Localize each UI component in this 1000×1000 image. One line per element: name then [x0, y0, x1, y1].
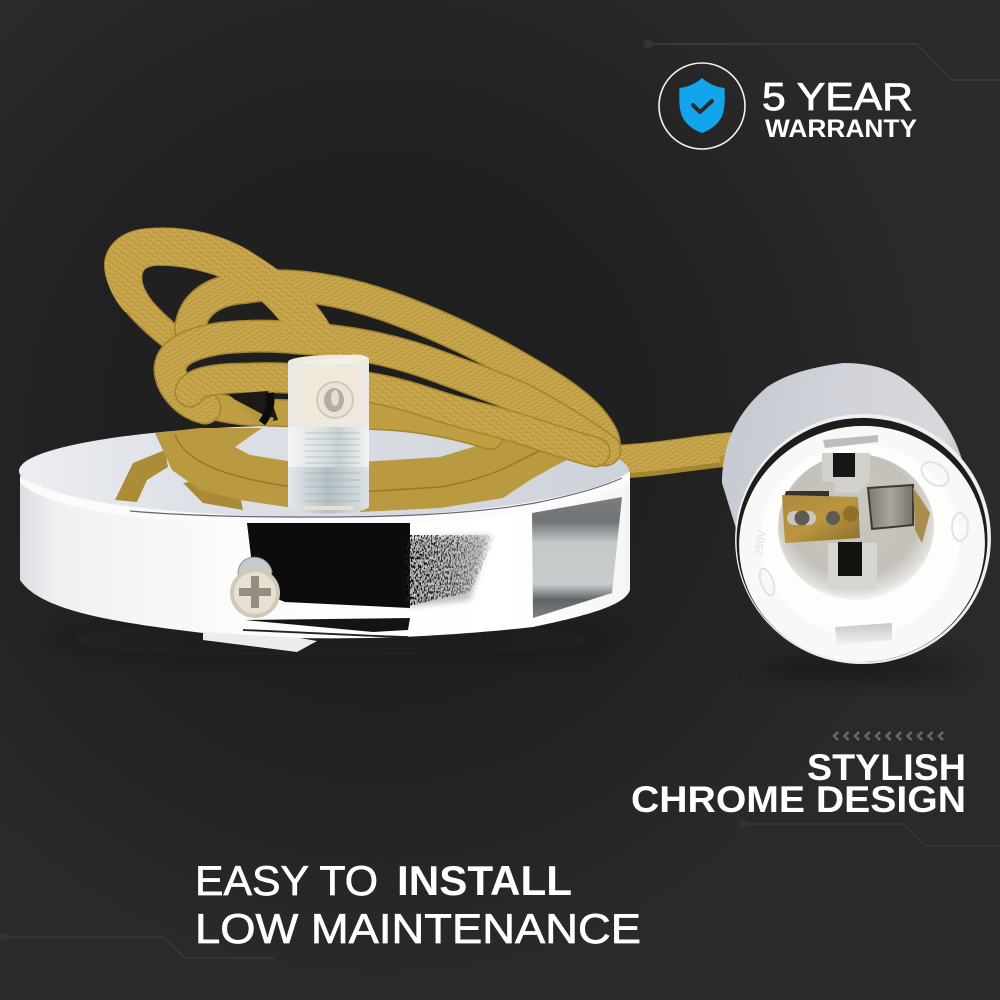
- embossed rating text: 250V: [753, 529, 769, 556]
- holder shadow: [755, 662, 965, 674]
- clip under disc: [203, 632, 317, 652]
- nickel contact: [868, 485, 930, 543]
- white face: [724, 410, 1000, 678]
- cable: lower coil band: [195, 398, 490, 436]
- side panel: chrome window: [532, 497, 622, 618]
- decorative circuit line: bottom left: [0, 933, 275, 958]
- dark gap with black wire: [228, 391, 278, 423]
- clamp threaded section: translucent: [288, 427, 369, 467]
- product: lamp holder: [719, 363, 1000, 681]
- embossed marks: [757, 457, 968, 597]
- bottom notch: [835, 623, 892, 645]
- clamp screw: [317, 382, 353, 418]
- product: ceiling disc with gold cable: [19, 228, 630, 652]
- text: 5 year: 5 YEAR: [762, 76, 913, 119]
- decorative circuit line: lower right: [739, 820, 1000, 846]
- right main reflection: [360, 432, 590, 512]
- decorative circuit line: top right: [643, 39, 1000, 80]
- disc side wall: [20, 472, 630, 638]
- disc front edge line: [130, 478, 622, 517]
- translucent cord clamp: [288, 355, 369, 514]
- brass contact: [782, 491, 860, 543]
- heading: easy to install low maintenance: INSTALL: [397, 857, 572, 904]
- cable: coil outer band: [170, 336, 605, 450]
- right reflection seam: [360, 445, 553, 492]
- clamp threaded section: solid lower: [288, 467, 369, 514]
- cable to lamp holder: [600, 447, 740, 498]
- clamp thread lines: [305, 433, 360, 501]
- cable: back loop: [105, 228, 343, 357]
- disc front bevel highlight: [20, 472, 629, 526]
- reflections of cable on disc top: [115, 428, 590, 512]
- heading: stylish chrome design: STYLISH: [807, 747, 966, 788]
- clamp bottom tan edge: [303, 506, 353, 510]
- side panel: grey tone under speckle: [408, 535, 490, 607]
- inner face ring: [760, 444, 960, 636]
- warranty badge: [659, 63, 917, 149]
- top black slot: [833, 453, 855, 477]
- chrome body: [722, 363, 990, 660]
- clamp top opening: [298, 355, 369, 365]
- cable: front braided section into clamp: [105, 228, 343, 357]
- clamp upper body: [288, 355, 369, 430]
- side panel: speckled reflection: [405, 535, 497, 607]
- heading: stylish chrome design: CHROME DESIGN: [631, 779, 966, 820]
- cable: coil inner band: [190, 378, 595, 452]
- heading: easy to install low maintenance: [195, 857, 641, 952]
- top slot surround: [822, 453, 870, 493]
- chevron row: [834, 732, 943, 740]
- icon: shield in circle: [659, 63, 745, 149]
- left reflection seams: [175, 435, 300, 488]
- bottom black slot: [838, 542, 862, 576]
- side panel: dark chrome reflection: [247, 523, 410, 608]
- heading: easy to install low maintenance: EASY TO: [195, 857, 378, 904]
- left stub reflection: [115, 450, 168, 502]
- dark ring: [721, 402, 1000, 678]
- side panel: thin line: [243, 630, 408, 637]
- chrome outer rim: [719, 397, 1000, 681]
- left main reflection: [155, 428, 300, 509]
- lower small stub reflection: [183, 480, 243, 510]
- clamp tan window: [303, 368, 360, 420]
- socket hole: [778, 454, 934, 600]
- screw: [230, 557, 280, 618]
- disc top face: [19, 425, 629, 517]
- text: warranty: WARRANTY: [765, 115, 917, 143]
- top notch: [823, 435, 878, 448]
- disc floor shadow: [40, 632, 620, 648]
- heading: stylish chrome design: [631, 747, 966, 820]
- cable: long back arc: [190, 285, 605, 450]
- side panel: black streak: [245, 618, 410, 632]
- bottom slot surround: [828, 543, 877, 590]
- heading: easy to install low maintenance: LOW MAINTENANCE: [195, 905, 641, 952]
